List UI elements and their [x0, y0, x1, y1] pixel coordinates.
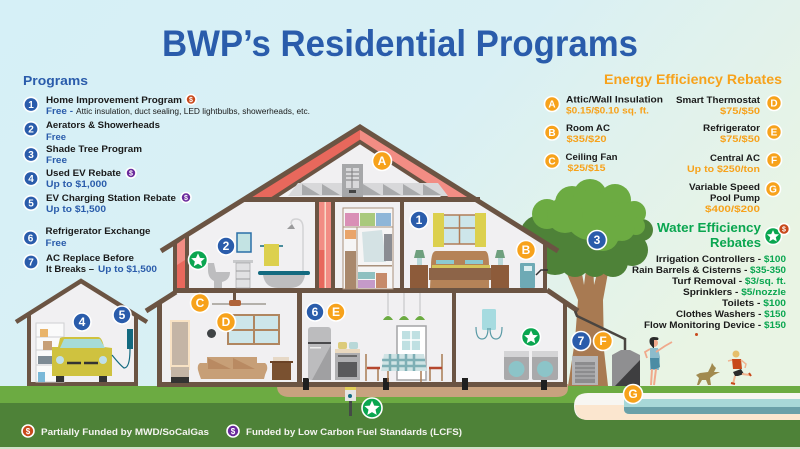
program 2 — [24, 120, 160, 143]
main house — [146, 127, 578, 390]
gutter downspout — [575, 311, 625, 350]
badge 4 — [73, 313, 91, 331]
heading: water efficiency rebates — [657, 221, 761, 250]
badge A — [372, 152, 392, 170]
ball — [695, 333, 698, 336]
badge 4: 4 — [79, 315, 86, 329]
woman — [645, 337, 672, 385]
rebate D: D — [770, 98, 778, 110]
water rebate list: Irrigation Controllers - $100 — [656, 254, 786, 265]
program 7: Up to $1,500 — [98, 264, 157, 275]
rebate F — [687, 152, 782, 175]
water rebate list: Sprinklers - $5/nozzle — [683, 287, 786, 298]
icon: washer — [504, 351, 529, 380]
icon: funded badge: $ — [782, 226, 786, 234]
rebate G — [689, 182, 780, 215]
badge 5 — [113, 306, 131, 324]
rebate A: A — [548, 100, 556, 110]
icon: dining table — [381, 354, 427, 382]
rebate B: B — [548, 128, 556, 139]
badge C — [190, 294, 210, 312]
panel: water efficiency rebates — [632, 221, 790, 331]
icon: sofa — [198, 357, 267, 379]
badge C: C — [196, 296, 205, 310]
icon: door — [397, 326, 426, 380]
badge D: D — [222, 315, 231, 329]
badge 1: 1 — [416, 213, 423, 227]
icon: stove — [335, 349, 360, 380]
badge F — [594, 332, 612, 350]
program 6: Free — [46, 238, 66, 249]
heading: energy efficiency rebates: Energy Efficiency Rebates — [604, 72, 782, 87]
program 6 — [23, 226, 150, 249]
icon: pendant lights — [383, 293, 425, 320]
program 3 — [24, 144, 142, 166]
program 6: 6 — [28, 234, 34, 244]
icon: curtains — [433, 213, 486, 247]
icon: shower — [291, 219, 303, 272]
rebate C: Ceiling Fan — [566, 152, 618, 163]
AC unit — [572, 356, 598, 385]
panel: energy efficiency rebates — [544, 72, 782, 215]
rebate G: G — [769, 184, 777, 196]
tree trunk — [562, 262, 610, 386]
star badge: laundry — [522, 328, 540, 346]
garage walls — [27, 281, 138, 386]
garage — [16, 281, 147, 386]
rebate C: C — [548, 156, 556, 168]
icon: mirror — [237, 233, 251, 252]
icon: thermostat — [207, 329, 216, 338]
heading: water efficiency rebates: Rebates — [710, 236, 761, 250]
main roof — [161, 127, 558, 251]
interior walls fill — [160, 129, 563, 386]
badge 6 — [306, 303, 324, 321]
rebate A: Attic/Wall Insulation — [566, 94, 663, 106]
program 1: Attic insulation, duct sealing, LED lightbulbs, showerheads, etc. — [76, 107, 310, 116]
badge G — [624, 384, 642, 404]
boy — [728, 350, 751, 384]
program 4: $ — [129, 170, 133, 178]
program 4: Used EV Rebate — [46, 168, 121, 179]
water rebate list: Turf Removal - $3/sq. ft. — [672, 276, 786, 287]
legend — [22, 425, 462, 438]
tree — [520, 179, 653, 386]
heading: water efficiency rebates: Water Efficiency — [657, 221, 761, 235]
rebate B — [544, 123, 610, 145]
rebate E: $75/$50 — [720, 134, 760, 145]
rebate G: Variable Speed — [689, 182, 760, 193]
icon: ceiling fan — [212, 293, 266, 306]
icon: towel — [260, 244, 283, 266]
smart irrigation meter — [345, 387, 356, 416]
garage roof — [16, 281, 147, 322]
icon: water heater — [476, 309, 502, 339]
rebate G: $400/$200 — [705, 204, 760, 215]
heading: programs: Programs — [23, 74, 88, 88]
kitchen — [308, 293, 442, 382]
rebate D: Smart Thermostat — [676, 95, 761, 106]
program 1 — [24, 94, 310, 117]
ground — [0, 386, 800, 449]
badge F: F — [599, 334, 607, 348]
footings — [303, 378, 547, 390]
icon: lamps — [414, 250, 505, 265]
pool — [574, 393, 800, 420]
rebate E — [703, 123, 782, 145]
living room — [170, 293, 293, 383]
rebate B: $35/$20 — [566, 134, 606, 145]
rebate F: Up to $250/ton — [687, 164, 760, 175]
icon: pots — [338, 342, 358, 349]
badge D — [216, 312, 236, 332]
program 1: Free - — [46, 106, 73, 117]
utility room — [476, 309, 558, 380]
rain barrel — [612, 350, 640, 386]
title: BWP’s Residential Programs — [162, 23, 638, 64]
badge 3 — [588, 230, 606, 250]
water rebate list: Flow Monitoring Device - $150 — [644, 320, 786, 331]
badge 1 — [410, 211, 428, 229]
rebate C: $25/$15 — [568, 163, 606, 174]
program 7: It Breaks – — [46, 264, 94, 275]
legend: MWD/SoCalGas: Partially Funded by MWD/SoCalGas — [41, 427, 209, 438]
badge B: B — [522, 243, 531, 257]
program 6: Refrigerator Exchange — [46, 226, 150, 237]
badge 5: 5 — [119, 308, 126, 322]
rebate F: F — [771, 156, 777, 166]
star badge: irrigation — [362, 398, 382, 418]
badge G: G — [628, 387, 638, 401]
icon: bathtub — [258, 271, 310, 288]
icon: bed — [429, 251, 491, 288]
icon: window — [443, 215, 476, 244]
badge 6: 6 — [312, 305, 319, 319]
legend: LCFS: Funded by Low Carbon Fuel Standards (LCFS) — [246, 427, 462, 438]
closet — [343, 208, 393, 289]
icon: room AC — [520, 263, 548, 288]
program 5: 5 — [28, 198, 34, 210]
car — [52, 337, 112, 382]
rebate A: $0.15/$0.10 sq. ft. — [566, 106, 649, 116]
panel: programs list — [23, 74, 310, 275]
program 1: 1 — [28, 100, 34, 111]
foundation — [277, 384, 568, 397]
badge 7 — [572, 332, 590, 350]
icon: toilet — [208, 263, 230, 288]
bedroom — [410, 213, 548, 288]
charger — [112, 329, 133, 368]
attic vent and trusses — [288, 164, 448, 197]
icon: chairs — [366, 354, 442, 381]
program 1: Home Improvement Program — [46, 95, 182, 106]
water rebate list: Toilets - $100 — [722, 298, 786, 309]
badge E — [327, 303, 345, 321]
attic inner roof — [272, 142, 448, 199]
program 4 — [24, 168, 136, 190]
lower roof stubs — [146, 290, 578, 311]
program 1: $ — [189, 97, 193, 104]
icon: bookcase door — [170, 320, 190, 383]
program 5 — [24, 192, 191, 215]
icon: refrigerator — [308, 327, 331, 380]
garage shelves — [36, 323, 64, 382]
program 7 — [24, 253, 157, 275]
badge 2: 2 — [223, 239, 230, 253]
legend: LCFS: $ — [231, 427, 236, 436]
water rebate list: Clothes Washers - $150 — [676, 309, 786, 320]
legend: MWD/SoCalGas: $ — [26, 427, 31, 436]
water rebate list: Rain Barrels & Cisterns - $35-350 — [632, 265, 786, 276]
icon: vanity — [233, 260, 253, 288]
icon: side table — [270, 357, 293, 380]
tree canopy dark — [520, 197, 653, 277]
rebate E: Refrigerator — [703, 123, 760, 134]
program 3: Free — [46, 155, 67, 166]
program 7: AC Replace Before — [46, 253, 134, 264]
rebate E: E — [771, 128, 778, 138]
program 4: 4 — [28, 174, 34, 185]
rebate A — [544, 94, 663, 116]
water rebate list — [632, 254, 786, 331]
wall insulation — [177, 202, 331, 288]
icon: nightstands — [410, 265, 509, 288]
icon: dryer — [532, 351, 558, 380]
icon: funded badge — [778, 224, 790, 234]
badge E: E — [332, 305, 340, 319]
badge B — [516, 240, 536, 260]
program 2: Aerators & Showerheads — [46, 120, 160, 131]
icon: star badge — [764, 228, 782, 244]
badge A: A — [378, 154, 387, 168]
lower floor structure — [157, 293, 567, 387]
dog — [696, 363, 720, 385]
program 5: Up to $1,500 — [46, 204, 106, 215]
bathroom — [208, 219, 310, 288]
program 2: Free — [46, 132, 66, 143]
upper floor structure — [173, 197, 547, 293]
roof insulation — [252, 128, 468, 197]
program 5: EV Charging Station Rebate — [46, 193, 176, 204]
badge 7: 7 — [578, 334, 585, 348]
rebate C — [544, 152, 618, 174]
star badge: bathroom — [188, 250, 208, 270]
program 5: $ — [184, 195, 188, 202]
badge 2 — [217, 237, 235, 255]
program 7: 7 — [28, 258, 34, 268]
rebate G: Pool Pump — [710, 193, 760, 204]
badge 3: 3 — [594, 233, 601, 247]
program 3: Shade Tree Program — [46, 144, 142, 155]
rebate F: Central AC — [710, 153, 760, 164]
program 4: Up to $1,000 — [46, 179, 107, 190]
rebate B: Room AC — [566, 123, 610, 134]
rebate D: $75/$50 — [720, 106, 760, 117]
rebate D — [676, 95, 782, 117]
program 2: 2 — [28, 124, 34, 136]
icon: window — [228, 315, 279, 344]
program 3: 3 — [28, 150, 34, 161]
tree canopy light — [532, 179, 646, 251]
